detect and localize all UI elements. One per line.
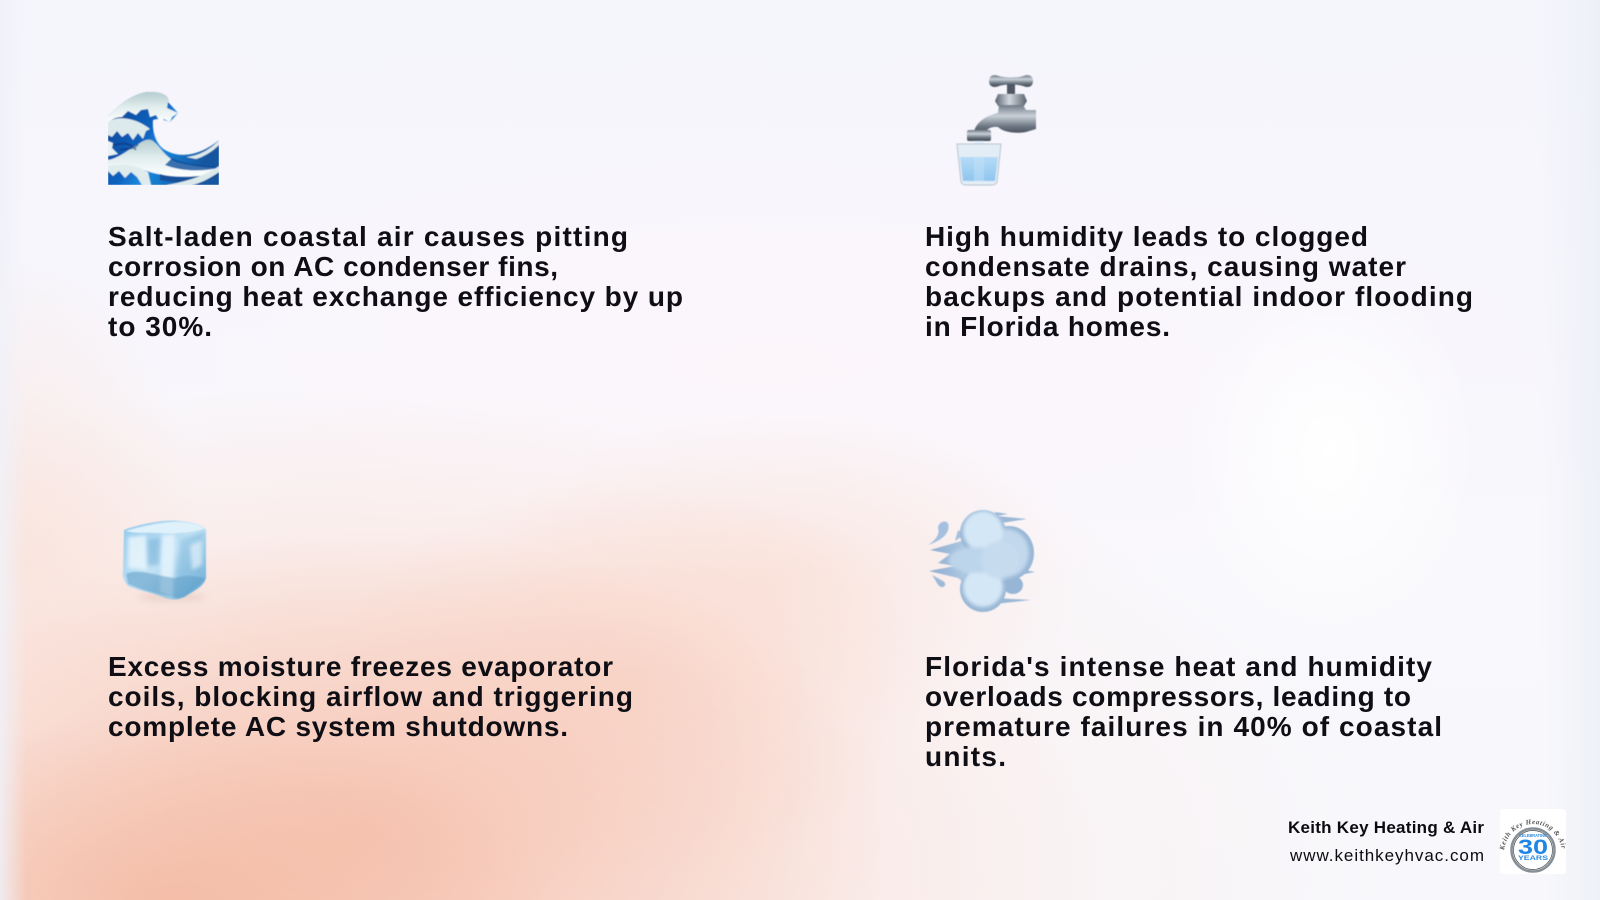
logo: 30 years badge: 30 [1518, 836, 1548, 859]
icon: faucet and glass of water [957, 75, 1036, 185]
text block: frozen evaporator coils: complete AC system shutdowns. [108, 711, 568, 742]
text block: compressor failures [925, 651, 1442, 772]
text block: frozen evaporator coils: Excess moisture freezes evaporator [108, 651, 613, 682]
text block: clogged condensate drains [925, 221, 1473, 342]
company name and website [1288, 818, 1484, 865]
text block: salt corrosion: corrosion on AC condenser fins, [108, 251, 558, 282]
text block: compressor failures: units. [925, 741, 1006, 772]
text block: frozen evaporator coils: coils, blocking airflow and triggering [108, 681, 633, 712]
text block: compressor failures: premature failures in 40% of coastal [925, 711, 1442, 742]
text block: salt corrosion: Salt-laden coastal air causes pitting [108, 221, 628, 252]
logo: 30 years badge [1500, 809, 1566, 874]
text block: salt corrosion: reducing heat exchange efficiency by up [108, 281, 683, 312]
icon: ice cube [123, 521, 206, 601]
text block: salt corrosion: to 30%. [108, 311, 212, 342]
text block: compressor failures: Florida's intense heat and humidity [925, 651, 1432, 682]
company name and website: www.keithkeyhvac.com [1289, 846, 1484, 865]
logo: 30 years badge: YEARS [1518, 856, 1548, 862]
text block: frozen evaporator coils [108, 651, 633, 742]
text block: clogged condensate drains: backups and potential indoor flooding [925, 281, 1473, 312]
text block: compressor failures: overloads compressors, leading to [925, 681, 1411, 712]
company name and website: Keith Key Heating & Air [1288, 818, 1484, 837]
text block: clogged condensate drains: condensate drains, causing water [925, 251, 1406, 282]
text block: clogged condensate drains: in Florida homes. [925, 311, 1170, 342]
text block: clogged condensate drains: High humidity leads to clogged [925, 221, 1368, 252]
icon: ocean wave [108, 92, 219, 185]
logo: 30 years badge: CELEBRATING [1519, 833, 1547, 838]
icon: gust of wind cloud [928, 510, 1035, 612]
logo: 30 years badge: Keith Key Heating & Air [1500, 819, 1566, 850]
text block: salt corrosion [108, 221, 683, 342]
